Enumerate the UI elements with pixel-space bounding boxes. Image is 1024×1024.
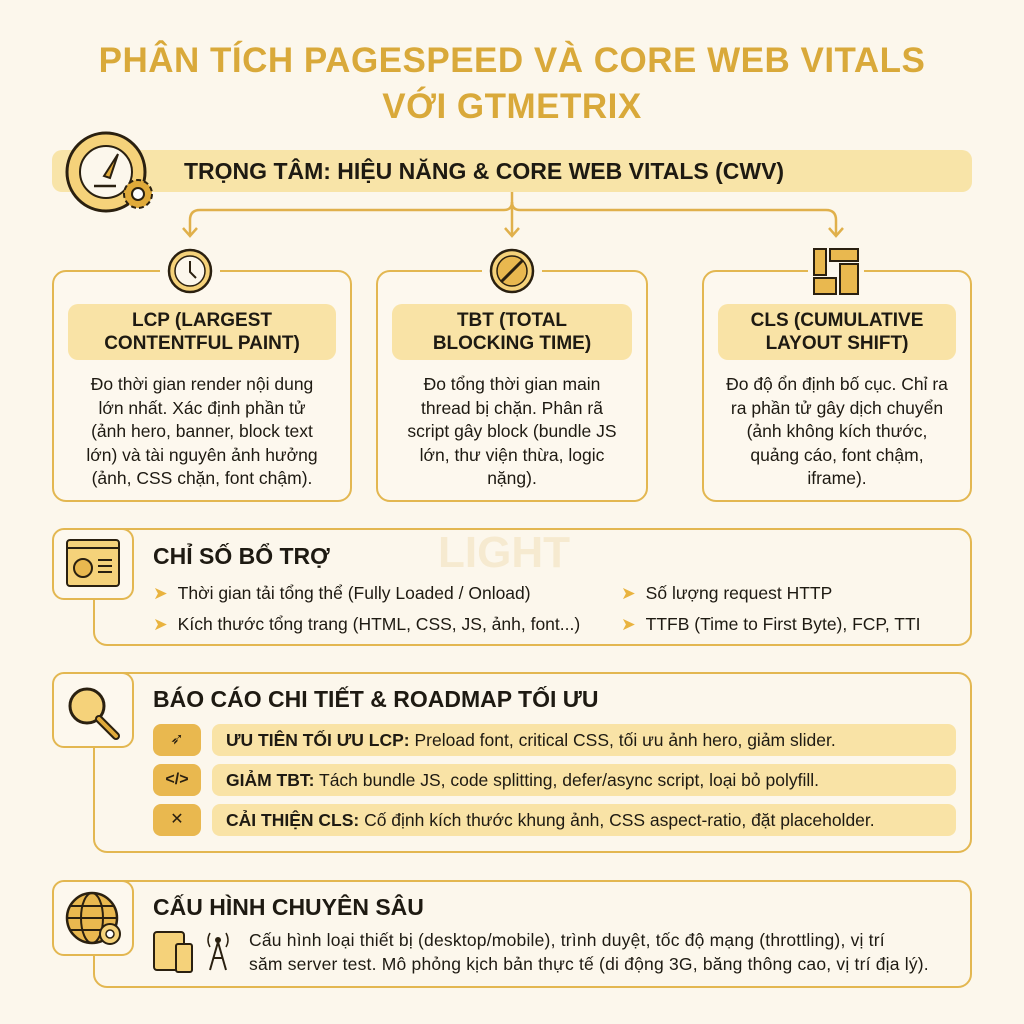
icon: blocked — [482, 248, 542, 294]
header bar — [52, 150, 972, 192]
card: TBT: Đo tổng thời gian main — [424, 374, 600, 394]
card: TBT: TBT (TOTAL — [457, 310, 567, 331]
panel: chỉ số bổ trợ: ➤ Số lượng request HTTP — [621, 583, 832, 603]
icon: dashboard — [52, 528, 134, 600]
panel: cấu hình — [93, 880, 972, 988]
arrows: connectors — [182, 192, 844, 238]
card: CLS: iframe). — [807, 468, 867, 488]
icon: clock — [160, 248, 220, 294]
card: CLS: Đo độ ổn định bố cục. Chỉ ra — [726, 374, 948, 394]
card: LCP: (ảnh hero, banner, block text — [91, 421, 313, 441]
text: săm server test. Mô phỏng kịch bản thực tế (di động 3G, băng thông cao, vị trí địa lý). — [249, 954, 929, 974]
panel: chỉ số bổ trợ — [93, 528, 972, 646]
row: LCP: ➶ — [170, 731, 184, 748]
card: LCP: LCP (LARGEST — [132, 310, 272, 331]
card: CLS: ra phần tử gây dịch chuyển — [731, 398, 943, 418]
heading: BÁO CÁO CHI TIẾT & ROADMAP TỐI ƯU — [153, 686, 598, 712]
row: LCP — [153, 724, 201, 756]
card: TBT: lớn, thư viện thừa, logic — [420, 444, 604, 464]
card: TBT: script gây block (bundle JS — [407, 421, 617, 441]
bullets: ➤ Kích thước tổng trang (HTML, CSS, JS, ảnh, font...) — [153, 614, 580, 634]
row: CLS — [153, 804, 201, 836]
text: Cấu hình loại thiết bị (desktop/mobile), trình duyệt, tốc độ mạng (throttling), vị trí — [249, 930, 885, 950]
text — [249, 930, 929, 974]
icon: gauge — [66, 132, 153, 212]
text: ƯU TIÊN TỐI ƯU LCP: Preload font, critical CSS, tối ưu ảnh hero, giảm slider. — [226, 730, 836, 750]
card: LCP: lớn) và tài nguyên ảnh hưởng — [86, 444, 318, 464]
bullets: ➤ Thời gian tải tổng thể (Fully Loaded / Onload) — [153, 583, 531, 603]
header bar: TRỌNG TÂM: HIỆU NĂNG & CORE WEB VITALS (CWV) — [184, 158, 784, 184]
panel: chỉ số bổ trợ: ➤ TTFB (Time to First Byte), FCP, TTI — [621, 614, 921, 634]
card: TBT: thread bị chặn. Phân rã — [421, 398, 603, 418]
card: CLS: (ảnh không kích thước, — [747, 421, 927, 441]
bullets — [153, 583, 580, 634]
card: LCP: Đo thời gian render nội dung — [91, 374, 313, 394]
card: CLS: CLS (CUMULATIVE — [751, 310, 923, 331]
card: TBT: nặng). — [487, 468, 537, 488]
title — [99, 40, 925, 126]
card: LCP: CONTENTFUL PAINT) — [104, 333, 300, 354]
row: CLS: ✕ — [170, 811, 184, 828]
panel: báo cáo — [93, 672, 972, 853]
card: CLS — [702, 270, 972, 502]
row: TBT: </> — [165, 771, 189, 788]
title: VỚI GTMETRIX — [382, 87, 642, 126]
card: LCP: (ảnh, CSS chặn, font chậm). — [92, 468, 312, 488]
watermark: LIGHT — [438, 528, 570, 577]
icon: devices — [153, 931, 229, 973]
card: LCP: lớn nhất. Xác định phần tử — [98, 398, 306, 418]
card: CLS: quảng cáo, font chậm, — [750, 444, 924, 464]
icon: globe — [52, 880, 134, 956]
title: PHÂN TÍCH PAGESPEED VÀ CORE WEB VITALS — [99, 41, 925, 80]
card: TBT — [376, 270, 648, 502]
card: LCP — [52, 270, 352, 502]
text: CẢI THIỆN CLS: Cố định kích thước khung ảnh, CSS aspect-ratio, đặt placeholder. — [226, 810, 875, 830]
heading: CẤU HÌNH CHUYÊN SÂU — [153, 894, 424, 920]
card: CLS: LAYOUT SHIFT) — [766, 333, 908, 354]
row: TBT — [153, 764, 201, 796]
card: TBT: BLOCKING TIME) — [433, 333, 591, 354]
icon: layout blocks — [808, 248, 864, 295]
heading: CHỈ SỐ BỔ TRỢ — [153, 543, 330, 569]
icon: magnifier — [52, 672, 134, 748]
text: GIẢM TBT: Tách bundle JS, code splitting, defer/async script, loại bỏ polyfill. — [226, 770, 819, 790]
